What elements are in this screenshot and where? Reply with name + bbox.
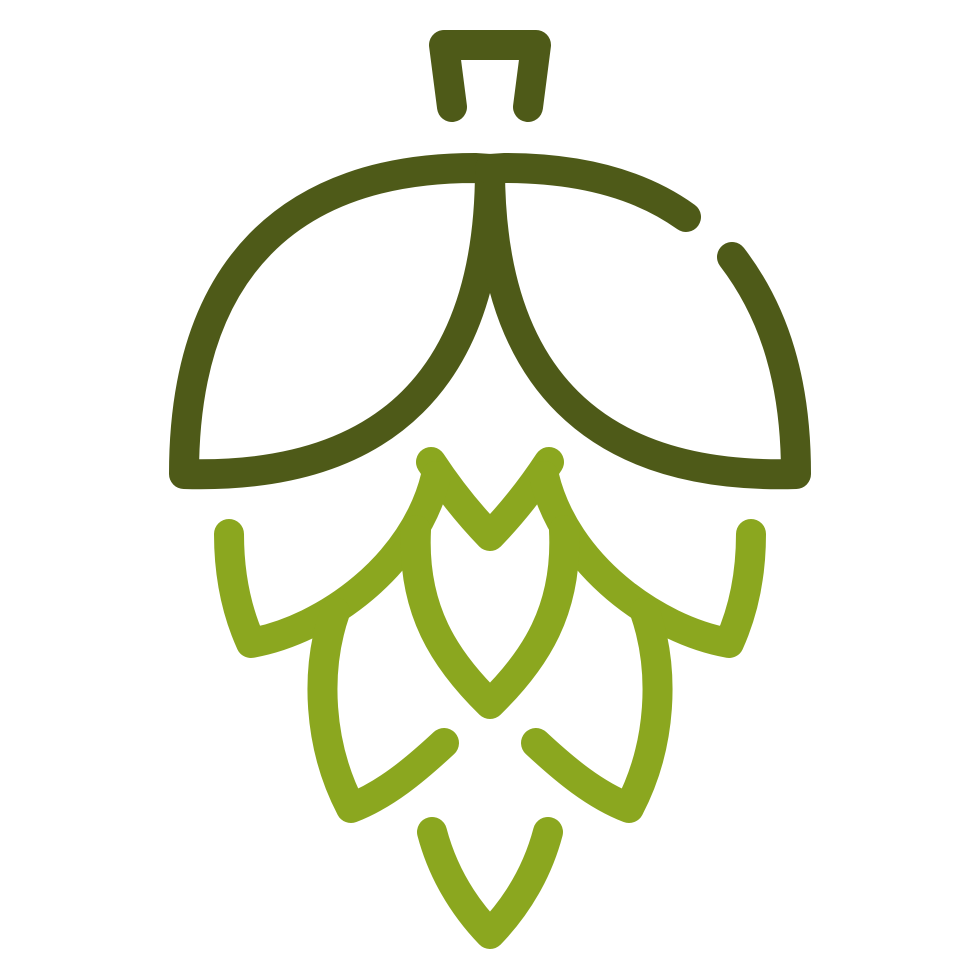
upper leaf: left — [184, 168, 490, 474]
upper leaf: right inner curve and bottom — [490, 169, 796, 474]
upper leaf: right top arc — [490, 168, 686, 217]
bottom tip scale — [432, 832, 548, 934]
lower right scale — [536, 612, 658, 808]
top centre scale — [431, 462, 549, 536]
right wing scale — [544, 476, 751, 643]
centre scale — [416, 530, 564, 704]
lower left scale — [322, 612, 444, 808]
left wing scale — [229, 476, 436, 643]
stem — [444, 45, 536, 107]
